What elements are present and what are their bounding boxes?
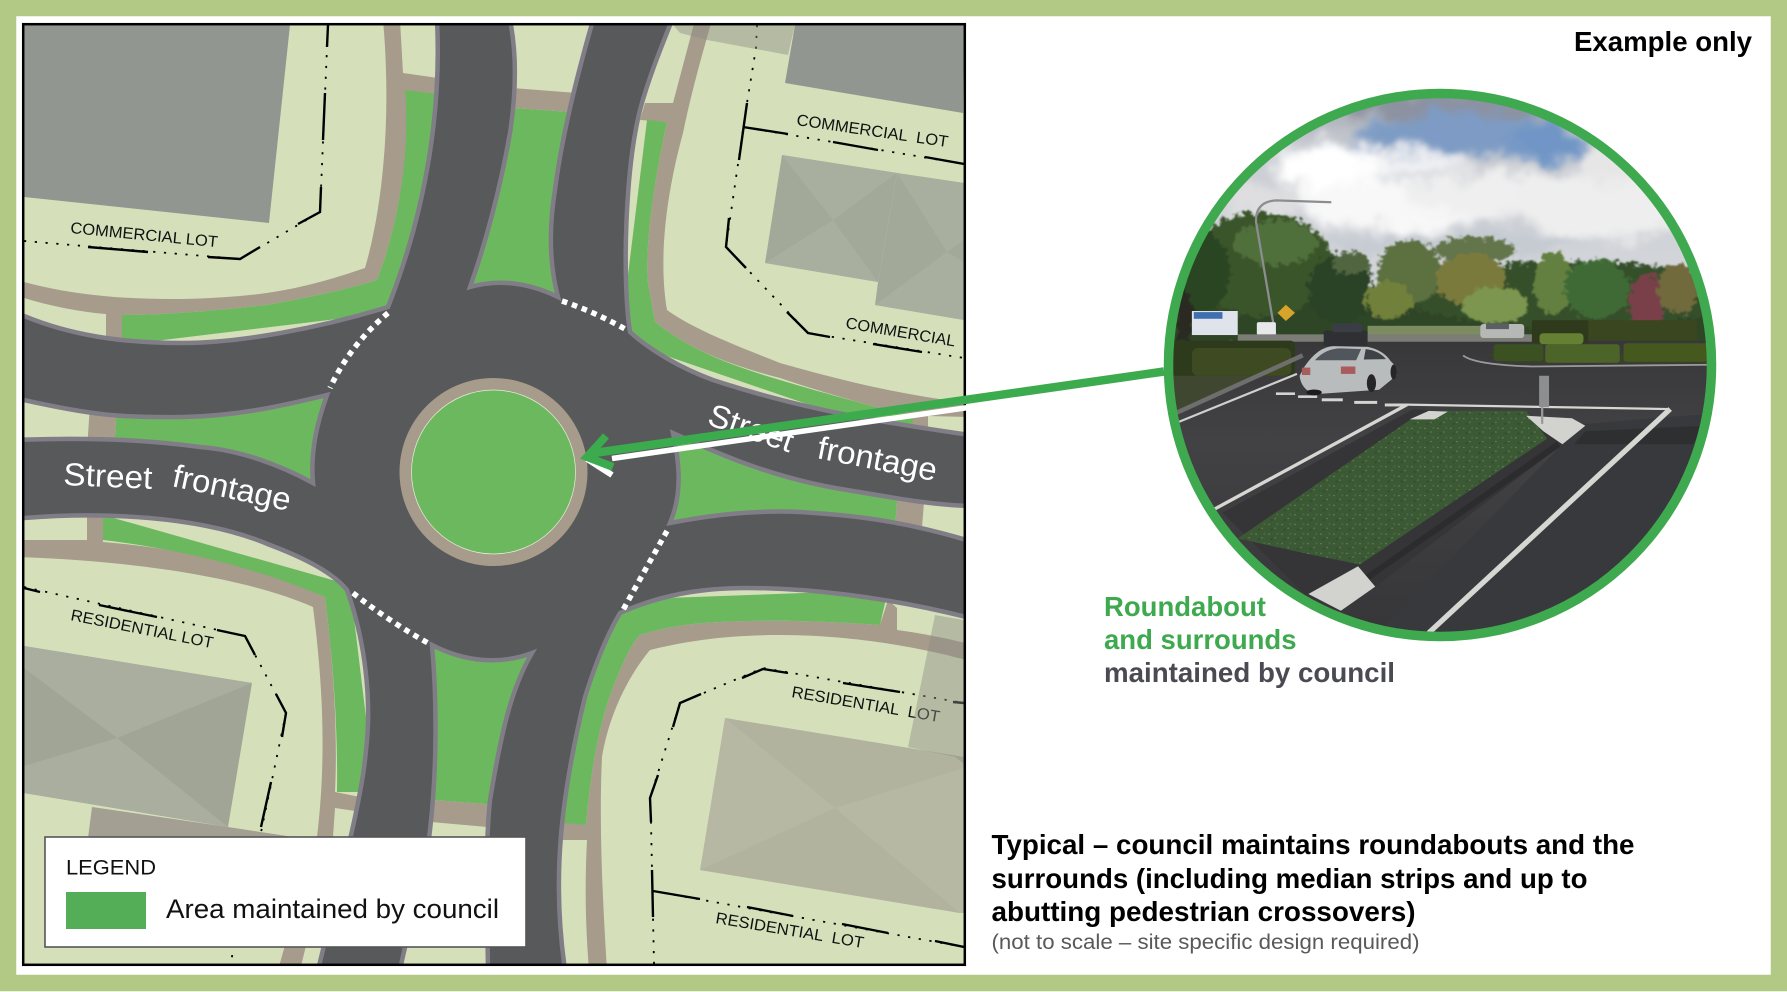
median dark surround — [1223, 409, 1585, 531]
driveway overlays — [673, 25, 964, 764]
road labels — [63, 397, 940, 518]
panel: roundabout map — [10, 15, 975, 980]
legend — [45, 837, 526, 947]
lot boundary lines — [24, 25, 964, 965]
footpaths — [15, 20, 970, 970]
right hedges — [1463, 320, 1723, 366]
far kerb strip — [1238, 334, 1543, 342]
photo caption: maintained by council — [1104, 657, 1395, 688]
description text: surrounds (including median strips and up to — [992, 863, 1588, 894]
white van — [1257, 322, 1276, 335]
buildings — [24, 25, 964, 913]
arrow: photo to roundabout — [587, 372, 1164, 475]
map border — [23, 24, 965, 965]
description text — [992, 829, 1634, 927]
photo: roundabout street view — [1164, 88, 1716, 642]
road surface — [1174, 340, 1707, 626]
road labels: Street — [63, 456, 153, 496]
trees — [1174, 208, 1706, 341]
description text: abutting pedestrian crossovers) — [992, 896, 1416, 927]
photo caption: Roundabout — [1104, 591, 1266, 622]
photo caption: and surrounds — [1104, 624, 1297, 655]
sky and clouds — [1210, 98, 1690, 288]
median kerb — [1368, 444, 1559, 577]
warning sign — [1277, 305, 1295, 321]
pedestrian crossings — [330, 301, 667, 643]
lot labels: RESIDENTIAL LOT — [69, 607, 215, 652]
road labels: frontage — [170, 458, 294, 518]
central roundabout island — [400, 378, 588, 566]
lawn background — [24, 25, 964, 964]
council-maintained verge strips — [103, 90, 913, 825]
lot labels: RESIDENTIAL LOT — [790, 684, 941, 726]
photo caption — [1104, 591, 1395, 688]
shaded lanes — [1526, 420, 1700, 482]
median island: west — [10, 390, 327, 483]
street light — [1256, 200, 1331, 339]
bollard — [1539, 376, 1549, 407]
scale note: (not to scale – site specific design required) — [992, 930, 1420, 954]
shadow band — [1574, 426, 1708, 444]
note: example only: Example only — [1574, 26, 1753, 57]
road carriageway — [15, 20, 970, 970]
legend swatch — [66, 892, 146, 929]
lot labels: COMMERCIAL LOT — [795, 112, 949, 151]
lot labels: RESIDENTIAL LOT — [714, 910, 865, 952]
road labels: frontage — [815, 430, 940, 488]
median planting — [1238, 411, 1547, 564]
median island: south — [390, 645, 532, 980]
median island: north — [466, 25, 594, 302]
legend label: Area maintained by council — [166, 894, 499, 924]
road labels: Street — [704, 397, 799, 459]
median nose markers — [1308, 411, 1585, 611]
photo ring — [1168, 94, 1712, 636]
pedestrian markings — [1276, 392, 1408, 406]
description text: Typical – council maintains roundabouts and the — [992, 829, 1634, 860]
legend title: LEGEND — [66, 856, 156, 880]
shop — [1192, 311, 1238, 335]
left hedges and bed — [1169, 341, 1303, 422]
distant silver car — [1480, 323, 1524, 338]
far ground — [1368, 326, 1480, 334]
lane lines — [1215, 405, 1670, 633]
dark car — [1324, 323, 1368, 346]
lot labels: COMMERCIAL LOT — [70, 220, 219, 251]
lot labels: COMMERCIAL — [844, 315, 957, 350]
silver car — [1300, 346, 1397, 395]
median island: east — [670, 433, 975, 550]
lot labels — [69, 112, 957, 952]
